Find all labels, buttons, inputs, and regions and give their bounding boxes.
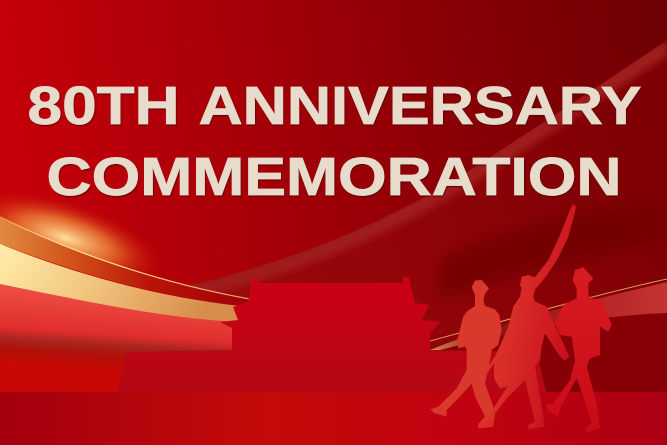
soldier right (546, 267, 612, 432)
cream ribbon (0, 244, 240, 322)
ground (0, 392, 667, 445)
right ribbons (430, 279, 667, 350)
title line 1: 80TH (28, 76, 180, 136)
background: dark lower right wall (430, 312, 667, 392)
gold line right (430, 279, 667, 341)
left ribbons (0, 197, 249, 392)
soldier centre with rifle (478, 205, 576, 429)
soldier left (430, 280, 502, 428)
background swoosh (190, 40, 667, 310)
title line 2: COMMEMORATION (46, 147, 622, 207)
swoosh lit edge (190, 46, 667, 291)
title (28, 76, 642, 207)
soldiers (430, 205, 612, 432)
wave shade under the edge at right (440, 200, 667, 300)
swoosh body (190, 40, 667, 310)
orange band under gold line (0, 218, 250, 306)
coral ribbon fading into red (0, 284, 240, 392)
title: ANNIVERSARY (198, 76, 642, 136)
gold line left (0, 217, 250, 299)
gate silhouette (117, 277, 546, 392)
right ribbon band (430, 282, 667, 350)
glow behind gold line (0, 197, 152, 278)
